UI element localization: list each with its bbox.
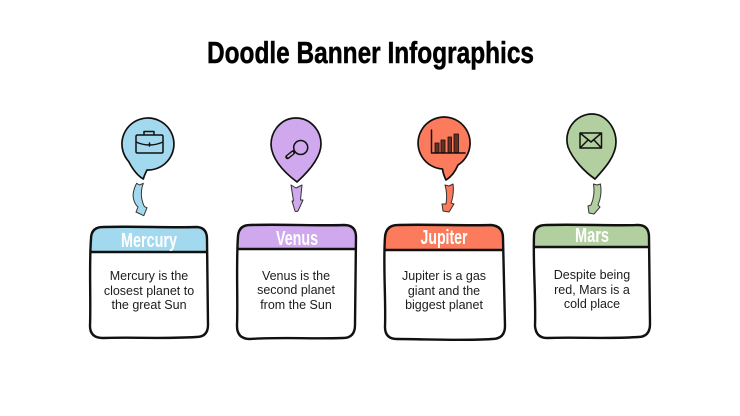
- text: Mercury description: Mercury is the: [110, 269, 188, 283]
- text: Mercury description: closest planet to: [104, 284, 194, 298]
- card: Mars: [534, 225, 650, 338]
- title: Doodle Banner Infographics: [207, 35, 534, 70]
- text: Venus description: Venus is the: [262, 269, 330, 283]
- panel: Venus column: [237, 118, 356, 339]
- text: Jupiter description: biggest planet: [405, 298, 483, 312]
- panel: Mars column: [534, 114, 650, 338]
- text: Mercury description: the great Sun: [111, 298, 187, 312]
- arrow: Jupiter: [442, 184, 454, 212]
- icon: Venus pin with magnifier: [271, 118, 321, 182]
- text: Mars description: red, Mars is a: [554, 283, 630, 297]
- heading: Mercury: Mercury: [121, 230, 178, 252]
- heading: Jupiter: Jupiter: [420, 227, 468, 249]
- panel: Mercury column: [90, 118, 208, 338]
- text: Jupiter description: giant and the: [408, 284, 480, 298]
- text: Mars description: Despite being: [554, 268, 630, 282]
- heading: Venus: Venus: [276, 228, 318, 250]
- arrow: Mercury: [133, 183, 147, 216]
- text: Venus description: from the Sun: [260, 298, 332, 312]
- icon: Jupiter pin with bar chart: [418, 117, 470, 180]
- icon: Mars pin with envelope: [567, 114, 616, 179]
- arrow: Venus: [291, 185, 303, 212]
- panel: Jupiter column: [384, 117, 505, 340]
- text: Venus description: second planet: [257, 283, 335, 297]
- card: Mercury: [90, 227, 208, 338]
- card: Jupiter: [384, 225, 505, 340]
- text: Mars description: cold place: [564, 297, 620, 311]
- icon: Mercury pin with briefcase: [122, 118, 174, 179]
- heading: Mars: Mars: [575, 225, 609, 247]
- text: Jupiter description: Jupiter is a gas: [402, 269, 486, 283]
- card: Venus: [237, 225, 356, 339]
- arrow: Mars: [588, 184, 601, 214]
